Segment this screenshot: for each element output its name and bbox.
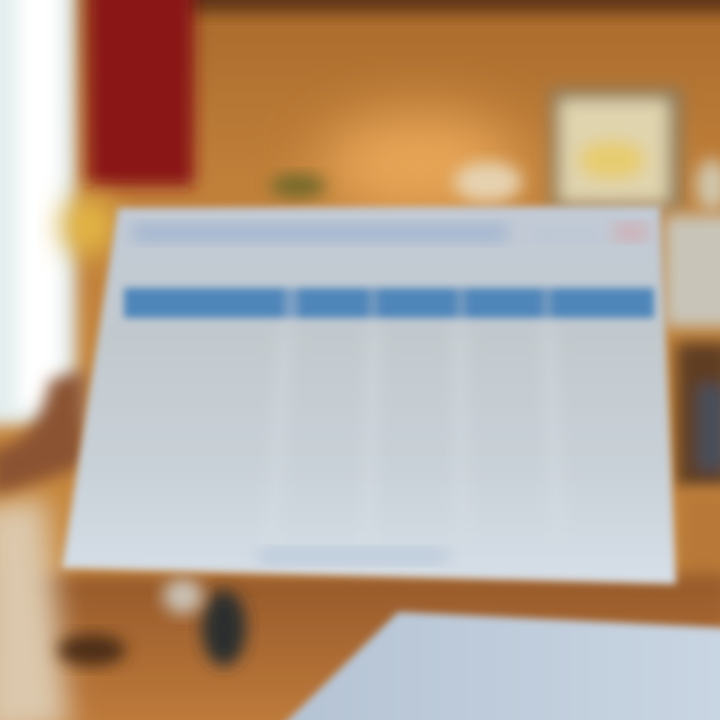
sheet body (62, 206, 676, 584)
dark ceiling band (180, 0, 720, 12)
picture frame (550, 88, 682, 210)
right side dark furniture (676, 342, 720, 487)
yellow object behind chart (60, 196, 116, 256)
right side pale object (664, 215, 720, 327)
footer text smear (258, 549, 448, 563)
red curtain (88, 0, 194, 186)
left bottom bright surface (0, 498, 70, 720)
white object on shelf (454, 162, 522, 202)
dark clip stand (202, 590, 246, 666)
pale stand highlight (163, 578, 203, 614)
table column lines (272, 325, 558, 540)
red accent at top right (614, 224, 648, 240)
right side wood (678, 492, 720, 602)
title text smear (132, 224, 508, 242)
hand holding chart (0, 370, 85, 495)
blue header band (124, 288, 654, 318)
table (0, 575, 720, 720)
bright window (0, 0, 76, 425)
lamp glow on wall (320, 115, 520, 215)
green plant on shelf (270, 174, 326, 198)
subtitle smear (530, 228, 600, 240)
foreground paper (278, 612, 720, 720)
chart sheet (62, 206, 676, 584)
dark object on table (58, 634, 126, 666)
